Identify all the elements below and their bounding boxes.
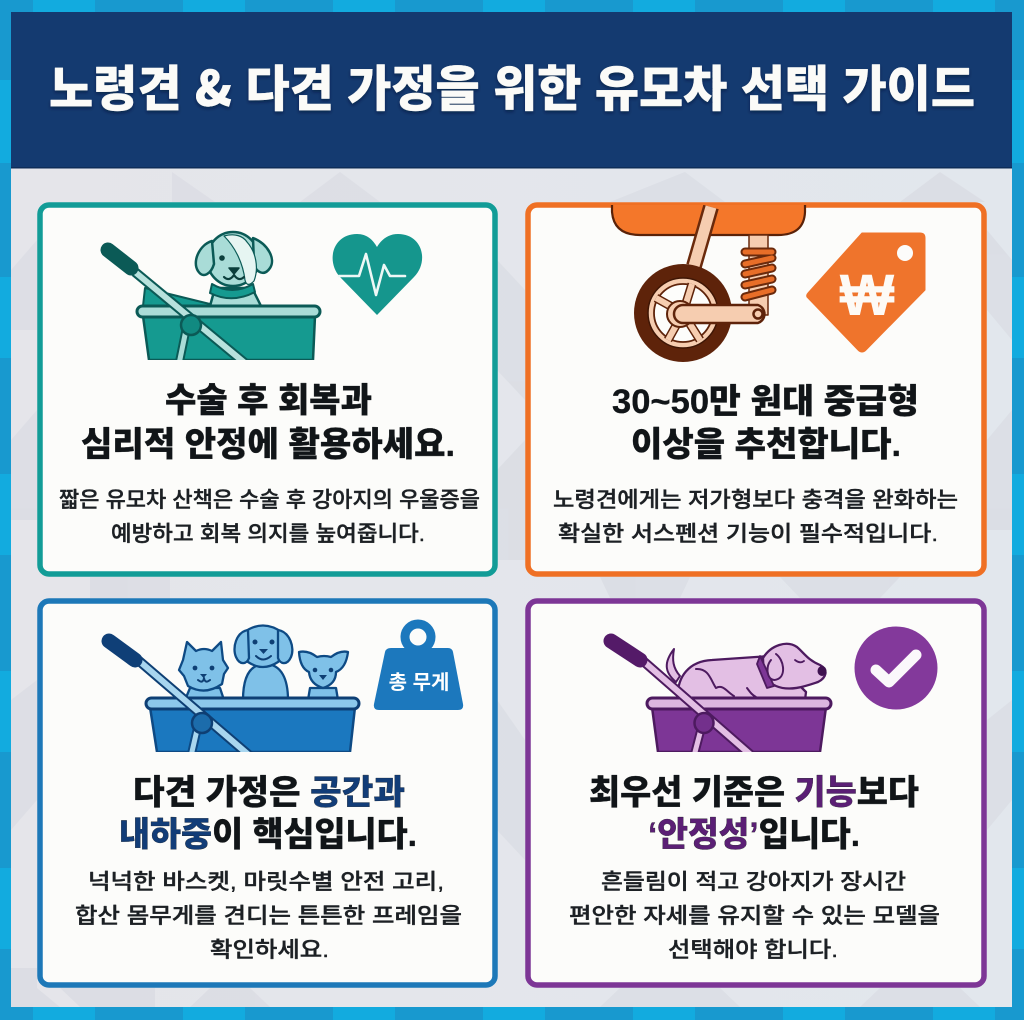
heading: 심리적 안정에 활용하세요. [81, 426, 455, 464]
panel: surgery recovery [40, 205, 495, 574]
icon: total weight [374, 624, 463, 710]
body text: 편안한 자세를 유지할 수 있는 모델을 [569, 904, 940, 928]
body text [59, 488, 480, 546]
body text: 넉넉한 바스켓, 마릿수별 안전 고리, [88, 870, 444, 894]
body text: 확실한 서스펜션 기능이 필수적입니다. [558, 522, 938, 546]
icon: stroller with resting dog [611, 641, 831, 756]
heading: 내하중이 핵심입니다. [119, 816, 417, 854]
heading: ‘안정성’입니다. [648, 816, 860, 854]
heading [119, 774, 417, 854]
body text: 확인하세요. [210, 938, 329, 962]
panel: stability first [528, 601, 984, 985]
heading: 이상을 추천합니다. [631, 426, 901, 464]
heading: 30~50만 원대 중급형 [612, 383, 919, 421]
body text: 짧은 유모차 산책은 수술 후 강아지의 우울증을 [59, 488, 480, 512]
icon: stroller with three pets [109, 626, 359, 756]
icon: suspension wheel [612, 203, 805, 362]
icon: won price tag: ₩ [840, 263, 895, 328]
heading [612, 383, 919, 464]
heading [589, 774, 919, 854]
body text: 흔들림이 적고 강아지가 장시간 [601, 870, 906, 894]
body text: 선택해야 합니다. [668, 938, 838, 962]
icon: check circle [854, 626, 938, 710]
icon: heart with pulse [333, 234, 422, 315]
icon: total weight: 총 무게 [389, 671, 449, 694]
panel: price range [528, 203, 984, 574]
panel: multi-dog home [40, 601, 495, 985]
heading: 수술 후 회복과 [165, 382, 372, 420]
heading: 최우선 기준은 기능보다 [589, 774, 919, 812]
body text: 노령견에게는 저가형보다 충격을 완화하는 [553, 488, 958, 512]
body text [75, 870, 462, 962]
icon: won price tag [807, 233, 925, 352]
header banner [11, 12, 1012, 168]
body text [569, 870, 940, 962]
body text: 합산 몸무게를 견디는 튼튼한 프레임을 [75, 904, 462, 928]
icon: stroller with bandaged dog [108, 232, 320, 364]
heading: 다견 가정은 공간과 [133, 774, 405, 812]
body text: 예방하고 회복 의지를 높여줍니다. [111, 522, 425, 546]
title: 노령견 & 다견 가정을 위한 유모차 선택 가이드 [49, 50, 975, 121]
heading [81, 382, 455, 464]
body text [553, 488, 958, 546]
